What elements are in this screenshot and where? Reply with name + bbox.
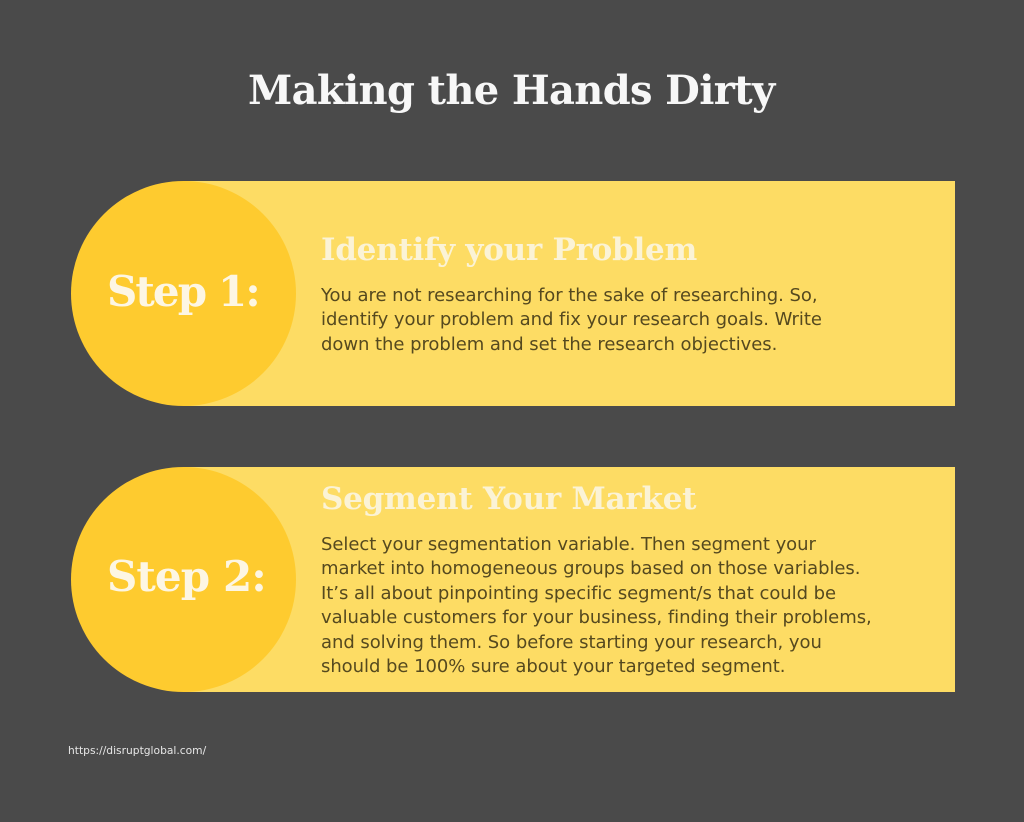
step 2 text: should be 100% sure about your targeted segment. bbox=[321, 656, 785, 677]
panel: step 1 bbox=[71, 181, 955, 406]
step 2 text: It’s all about pinpointing specific segment/s that could be bbox=[321, 583, 836, 604]
step 2 heading: Segment Your Market bbox=[321, 481, 696, 517]
banner: step 2 bbox=[184, 467, 955, 692]
step 2 text bbox=[321, 534, 872, 677]
title: Making the Hands Dirty bbox=[248, 67, 775, 114]
circle: step 1 bbox=[71, 181, 296, 406]
step 1 text: identify your problem and fix your research goals. Write bbox=[321, 309, 822, 330]
step 1 text bbox=[321, 285, 822, 355]
step 2 text: valuable customers for your business, finding their problems, bbox=[321, 607, 872, 628]
banner: step 1 bbox=[184, 181, 955, 406]
step 1 label: Step 1: bbox=[107, 267, 259, 316]
step 2 text: and solving them. So before starting your research, you bbox=[321, 632, 822, 653]
step 2 text: Select your segmentation variable. Then segment your bbox=[321, 534, 816, 555]
source url: https://disruptglobal.com/ bbox=[68, 744, 206, 757]
step 1 heading: Identify your Problem bbox=[321, 232, 697, 268]
step 1 text: down the problem and set the research objectives. bbox=[321, 334, 777, 355]
circle: step 2 bbox=[71, 467, 296, 692]
panel: step 2 bbox=[71, 467, 955, 692]
step 2 label: Step 2: bbox=[107, 552, 266, 601]
step 1 text: You are not researching for the sake of researching. So, bbox=[321, 285, 818, 306]
step 2 text: market into homogeneous groups based on those variables. bbox=[321, 558, 860, 579]
